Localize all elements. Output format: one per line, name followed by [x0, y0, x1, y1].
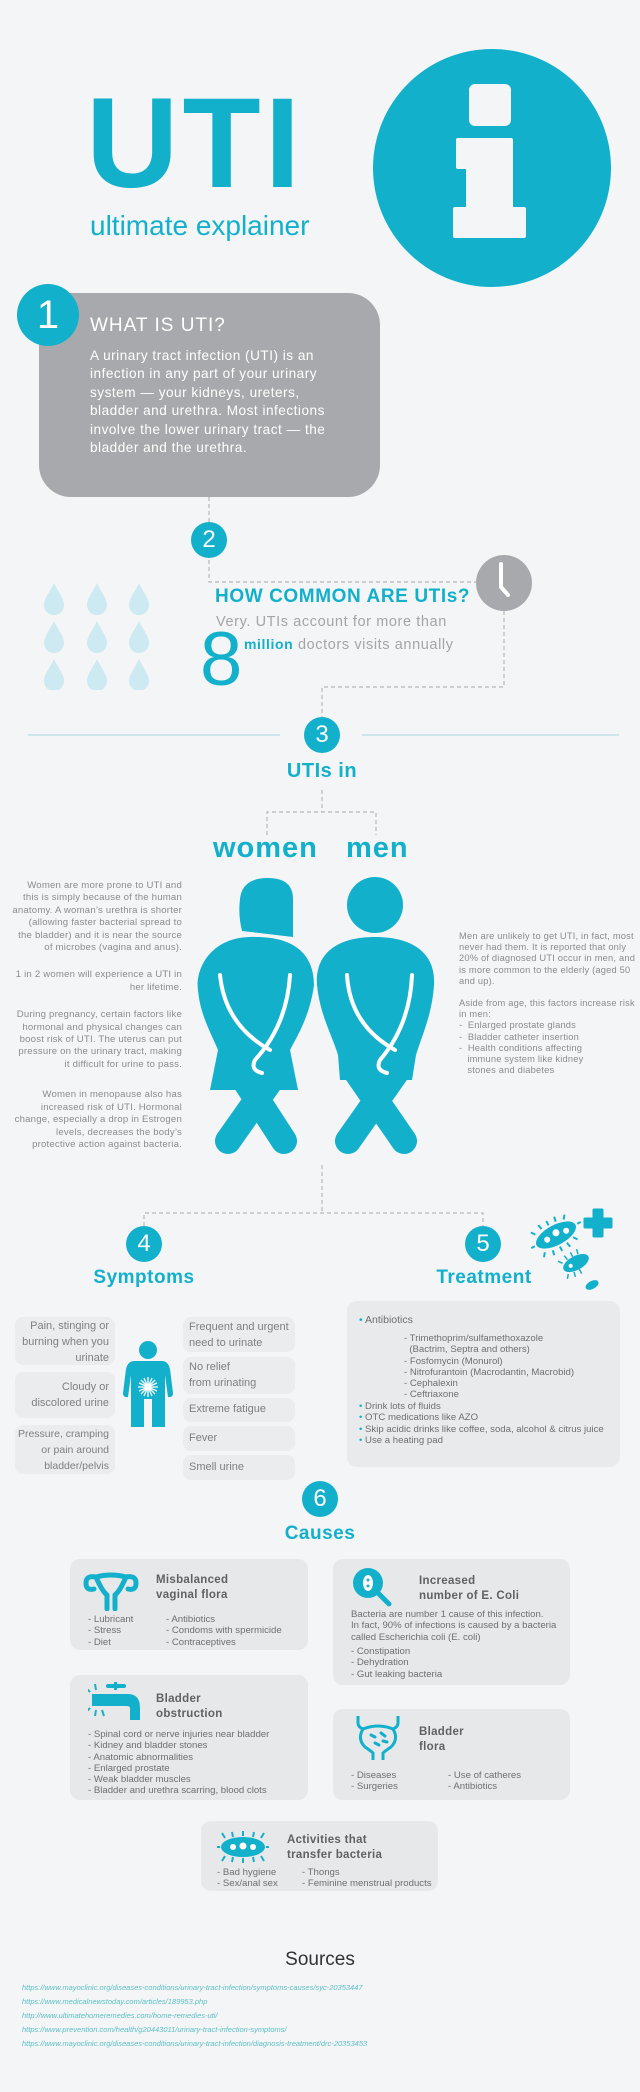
- card: E. coli: - Dehydration: [351, 1657, 409, 1668]
- number 3: [304, 717, 340, 753]
- number 4: 4: [137, 1230, 151, 1257]
- card: misbalanced vaginal flora: - Antibiotics: [166, 1614, 215, 1625]
- panel: treatment: • Antibiotics: [359, 1314, 413, 1326]
- symptom: Pain, stinging or burning when you urinate: [22, 1320, 109, 1364]
- heading: symptoms: Symptoms: [93, 1267, 195, 1288]
- card: activities: - Feminine menstrual products: [302, 1878, 432, 1889]
- number 4: [126, 1226, 162, 1262]
- panel: treatment: • Use a heating pad: [359, 1435, 443, 1446]
- card: misbalanced vaginal flora: - Stress: [88, 1625, 121, 1636]
- card: bladder obstruction: - Kidney and bladder stones: [88, 1740, 207, 1751]
- panel: treatment: • OTC medications like AZO: [359, 1412, 478, 1423]
- text block: A urinary tract infection (UTI) is an infection in any part of your urinary system — your kidneys, ureters, bladder and urethra. Most infections involve the lower urinary tract — the bladder and the urethra.: [90, 348, 325, 455]
- card: misbalanced vaginal flora: - Condoms with spermicide: [166, 1625, 282, 1636]
- number 1: [17, 284, 79, 346]
- text block: men: Men are unlikely to get UTI, in fact, most never had them. It is reported that only 20% of diagnosed UTI occur in men, and is more common to the elderly (aged 50 and up).: [459, 931, 635, 986]
- icon: bladder: [356, 1716, 400, 1760]
- symptom: Fever: [189, 1432, 217, 1444]
- panel: treatment: (Bactrim, Septra and others): [409, 1344, 530, 1355]
- symptoms right: [183, 1317, 295, 1480]
- card: bladder obstruction: - Spinal cord or nerve injuries near bladder: [88, 1729, 269, 1740]
- card: activities: transfer bacteria: [287, 1849, 382, 1861]
- icon: bacteria and cross: [530, 1208, 612, 1290]
- sources list: https://www.medicalnewstoday.com/articles/189953.php: [22, 1997, 207, 2006]
- number 5: [465, 1226, 501, 1262]
- sources list: [22, 1983, 368, 2048]
- heading: UTIs in: UTIs in: [287, 760, 357, 782]
- text block: men: - Enlarged prostate glands: [459, 1020, 576, 1030]
- symptom: from urinating: [189, 1377, 256, 1389]
- symptom: or pain around: [41, 1444, 109, 1456]
- card: bladder obstruction: - Bladder and urethra scarring, blood clots: [88, 1785, 267, 1796]
- card: activities: - Thongs: [302, 1867, 340, 1878]
- heading: causes: Causes: [285, 1523, 355, 1544]
- card: E. coli: [333, 1559, 570, 1685]
- panel: treatment: - Fosfomycin (Monurol): [404, 1356, 503, 1367]
- text block: men: immune system like kidney: [467, 1054, 583, 1064]
- card: bladder obstruction: [70, 1675, 308, 1800]
- text block: women: [12, 880, 182, 1150]
- number 3: 3: [315, 721, 329, 748]
- text block: men: [459, 931, 635, 1075]
- subtitle: ultimate explainer: [90, 210, 309, 241]
- icon: clock: [476, 555, 532, 611]
- text block: women: Women in menopause also has increased risk of UTI. Hormonal change, especially a drop in Estrogen levels, decreases the body’s protective action against bacteria.: [15, 1089, 182, 1150]
- sources list: https://www.prevention.com/health/g20443011/urinary-tract-infection-symptoms/: [22, 2025, 287, 2034]
- panel: treatment: - Ceftriaxone: [404, 1389, 459, 1400]
- text block: men: - Bladder catheter insertion: [459, 1032, 579, 1042]
- symptom: [183, 1426, 295, 1451]
- card: E. coli: - Gut leaking bacteria: [351, 1669, 442, 1680]
- panel: treatment: • Drink lots of fluids: [359, 1401, 441, 1412]
- card: misbalanced vaginal flora: - Contraceptives: [166, 1637, 236, 1648]
- number 5: 5: [476, 1230, 490, 1257]
- stat text: million doctors visits annually: [244, 636, 454, 653]
- number 6: 6: [313, 1485, 327, 1512]
- stat text: 8: [200, 617, 242, 702]
- symptom: [15, 1425, 115, 1474]
- heading: women: women: [213, 832, 318, 864]
- heading: how common: HOW COMMON ARE UTIs?: [215, 586, 470, 607]
- icon: uterus: [84, 1572, 138, 1611]
- card: bladder obstruction: - Weak bladder muscles: [88, 1774, 191, 1785]
- symptom: Pressure, cramping: [18, 1428, 109, 1440]
- number 2: 2: [202, 526, 216, 553]
- title: UTI: [86, 72, 304, 215]
- card: misbalanced vaginal flora: [70, 1559, 308, 1650]
- number 2: [191, 522, 227, 558]
- card: E. coli: Bacteria are number 1 cause of this infection.: [351, 1609, 544, 1620]
- symptom: [15, 1372, 115, 1418]
- icon: faucet: [88, 1682, 140, 1720]
- symptom: [183, 1455, 295, 1480]
- panel: treatment: - Nitrofurantoin (Macrodantin, Macrobid): [404, 1367, 574, 1378]
- number 1: 1: [37, 293, 59, 337]
- card: bladder flora: - Use of catheres: [448, 1770, 521, 1781]
- card: bladder flora: [333, 1709, 570, 1800]
- icon: person with pain: [123, 1341, 173, 1427]
- card: E. coli: - Constipation: [351, 1646, 410, 1657]
- symptom: Smell urine: [189, 1461, 244, 1473]
- symptom: bladder/pelvis: [44, 1460, 109, 1472]
- card: bladder obstruction: obstruction: [156, 1708, 223, 1720]
- card: E. coli: In fact, 90% of infections is caused by a bacteria: [351, 1620, 556, 1631]
- card: activities: - Bad hygiene: [217, 1867, 276, 1878]
- text block: men: stones and diabetes: [467, 1065, 554, 1075]
- text block: women: Women are more prone to UTI and this is simply because of the human anatomy. A woman’s urethra is shorter (allowing faster bacterial spread to the bladder) and it is near the source of microbes (vagina and anus).: [12, 880, 182, 953]
- card: activities: [201, 1821, 438, 1891]
- panel: treatment: • Skip acidic drinks like coffee, soda, alcohol & citrus juice: [359, 1424, 604, 1435]
- icon: info circle: [373, 49, 611, 287]
- symptom: [183, 1398, 295, 1422]
- sources list: http://www.ultimatehomeremedies.com/home-remedies-uti/: [22, 2011, 218, 2020]
- card: activities: Activities that: [287, 1834, 367, 1846]
- text block: men: Aside from age, this factors increase risk in men:: [459, 998, 635, 1019]
- card: misbalanced vaginal flora: Misbalanced: [156, 1574, 228, 1586]
- card: bladder obstruction: Bladder: [156, 1693, 201, 1705]
- card: E. coli: Increased: [419, 1575, 475, 1587]
- card: bladder flora: Bladder: [419, 1726, 464, 1738]
- text block: women: During pregnancy, certain factors like hormonal and physical changes can boost risk of UTI. The uterus can put pressure on the urinary tract, making it difficult for urine to pass.: [17, 1009, 182, 1070]
- sources list: https://www.mayoclinic.org/diseases-conditions/urinary-tract-infection/symptoms-causes/syc-20353447: [22, 1983, 363, 1992]
- symptom: Extreme fatigue: [189, 1403, 266, 1415]
- text block: men: - Health conditions affecting: [459, 1043, 582, 1053]
- text block: women: 1 in 2 women will experience a UTI in her lifetime.: [16, 969, 182, 993]
- symptom: No relief: [189, 1361, 230, 1373]
- card: E. coli: number of E. Coli: [419, 1590, 519, 1602]
- card: bladder obstruction: - Anatomic abnormalities: [88, 1752, 193, 1763]
- card: bladder obstruction: - Enlarged prostate: [88, 1763, 170, 1774]
- card: bladder flora: - Surgeries: [351, 1781, 398, 1792]
- number 6: [302, 1481, 338, 1517]
- stat text: [200, 614, 454, 702]
- heading: sources: Sources: [285, 1949, 355, 1970]
- card: misbalanced vaginal flora: - Lubricant: [88, 1614, 133, 1625]
- sources list: https://www.mayoclinic.org/diseases-conditions/urinary-tract-infection/diagnosis-treatment/drc-20353453: [22, 2039, 367, 2048]
- symptoms left: [15, 1317, 115, 1474]
- card: misbalanced vaginal flora: - Diet: [88, 1637, 111, 1648]
- card: bladder flora: - Antibiotics: [448, 1781, 497, 1792]
- stat text: Very. UTIs account for more than: [216, 614, 447, 630]
- heading: treatment: Treatment: [436, 1267, 532, 1288]
- icon: bacterium: [217, 1831, 269, 1863]
- heading: WHAT IS UTI?: [90, 315, 226, 336]
- card: activities: - Sex/anal sex: [217, 1878, 278, 1889]
- card: E. coli: called Escherichia coli (E. coli): [351, 1632, 481, 1643]
- panel: treatment: - Trimethoprim/sulfamethoxazole: [404, 1333, 543, 1344]
- card: misbalanced vaginal flora: vaginal flora: [156, 1589, 228, 1601]
- panel: treatment: [347, 1301, 620, 1467]
- panel: what is UTI: [39, 293, 380, 497]
- icon: magnifier bacteria: [353, 1568, 392, 1606]
- symptom: [183, 1357, 295, 1394]
- card: bladder flora: - Diseases: [351, 1770, 396, 1781]
- panel: treatment: - Cephalexin: [404, 1378, 458, 1389]
- icon: water drops: [44, 583, 149, 690]
- icon: women and men figures: [198, 877, 434, 1154]
- symptom: Frequent and urgent need to urinate: [189, 1321, 289, 1349]
- symptom: Cloudy or discolored urine: [31, 1381, 109, 1409]
- heading: men: men: [346, 832, 409, 864]
- card: bladder flora: flora: [419, 1741, 445, 1753]
